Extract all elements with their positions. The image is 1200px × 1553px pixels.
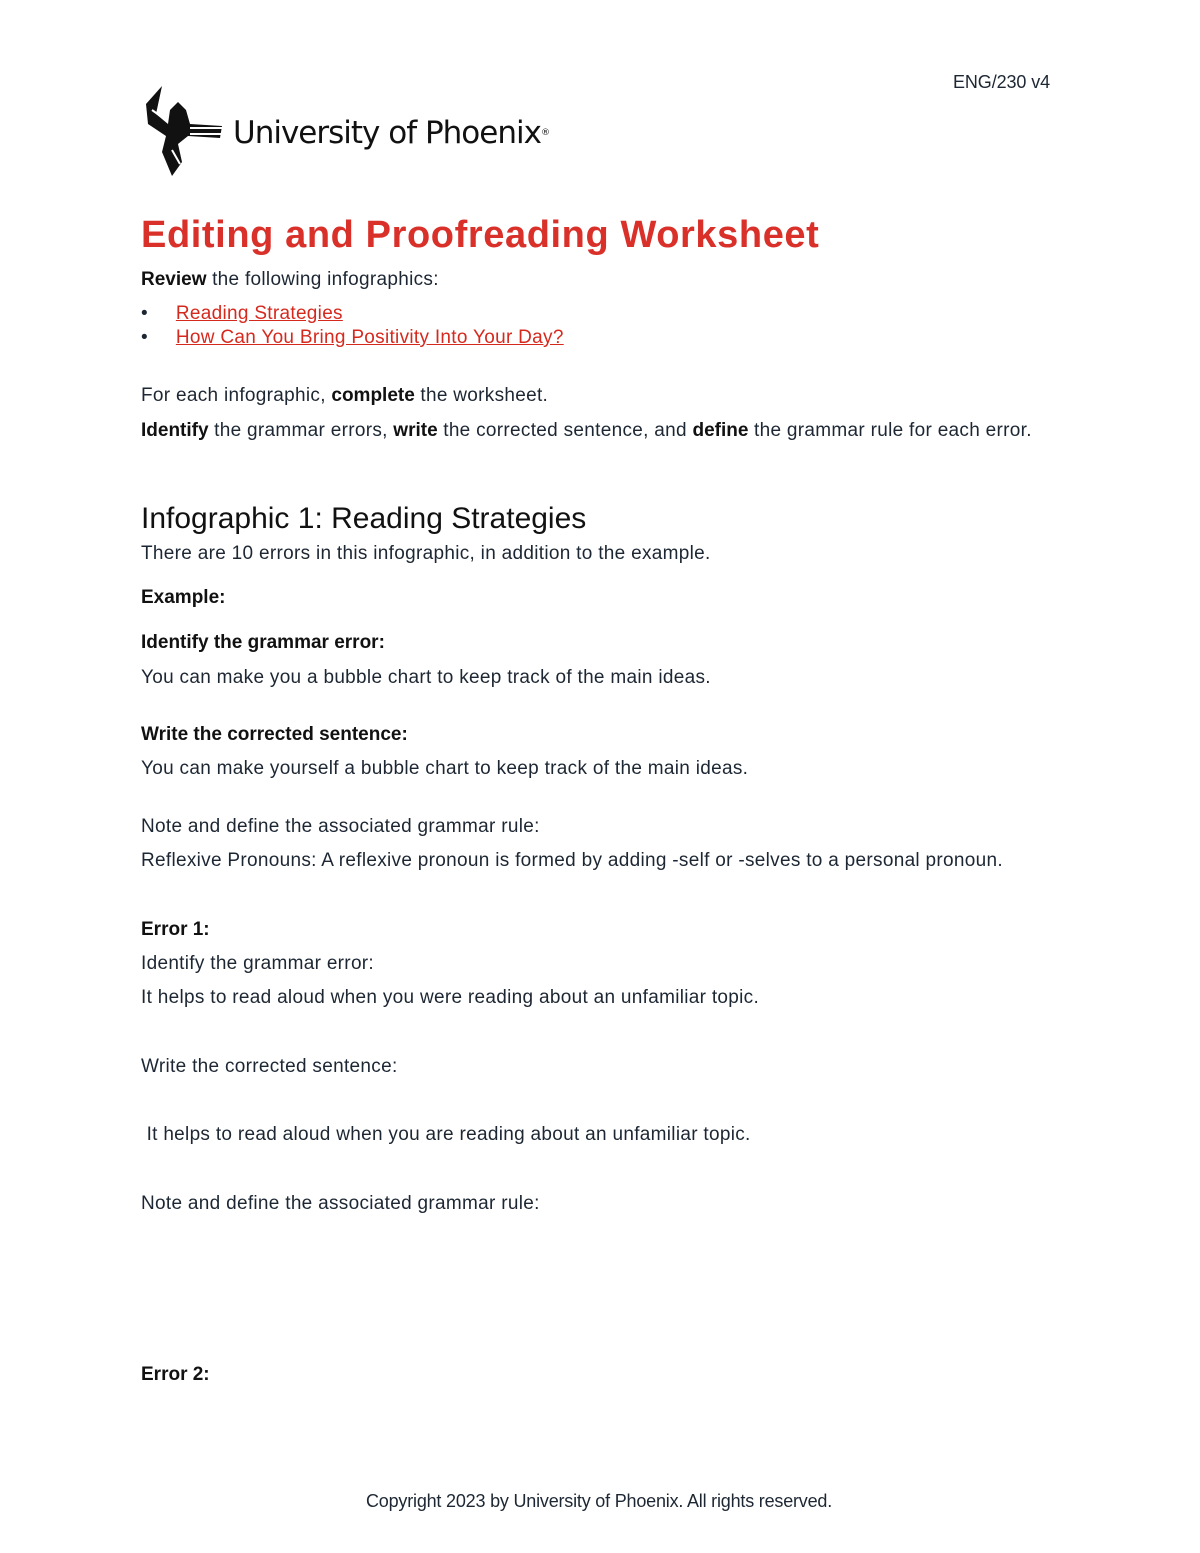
text: Write the corrected sentence: <box>141 724 408 745</box>
example block: Example: <box>141 587 225 608</box>
link list <box>141 303 564 348</box>
text: Reflexive Pronouns: A reflexive pronoun is formed by adding -self or -selves to a personal pronoun. <box>141 850 1003 871</box>
section heading: Infographic 1: Reading Strategies <box>141 502 586 535</box>
link list: • How Can You Bring Positivity Into Your Day? <box>141 327 564 348</box>
instructions: For each infographic, complete the worksheet. <box>141 385 548 406</box>
text: You can make you a bubble chart to keep track of the main ideas. <box>141 667 711 688</box>
text: It helps to read aloud when you were reading about an unfamiliar topic. <box>141 987 759 1008</box>
text: You can make yourself a bubble chart to keep track of the main ideas. <box>141 758 748 779</box>
error 1: Error 1: <box>141 919 210 940</box>
logo text: University of Phoenix® <box>233 115 549 151</box>
text: Note and define the associated grammar rule: <box>141 816 540 837</box>
logo <box>146 86 549 176</box>
error 2: Error 2: <box>141 1364 210 1385</box>
title: Editing and Proofreading Worksheet <box>141 214 819 256</box>
text: Identify the grammar error: <box>141 632 385 653</box>
intro: Review the following infographics: <box>141 269 439 290</box>
icon: phoenix <box>146 86 222 176</box>
text: Write the corrected sentence: <box>141 1056 398 1077</box>
text: There are 10 errors in this infographic, in addition to the example. <box>141 543 711 564</box>
text: Note and define the associated grammar rule: <box>141 1193 540 1214</box>
text: Identify the grammar error: <box>141 953 374 974</box>
link list: • Reading Strategies <box>141 303 343 324</box>
footer: Copyright 2023 by University of Phoenix. All rights reserved. <box>366 1491 832 1511</box>
header code: ENG/230 v4 <box>953 72 1050 92</box>
text: It helps to read aloud when you are reading about an unfamiliar topic. <box>147 1124 751 1145</box>
text: Identify the grammar errors, write the corrected sentence, and define the grammar rule for each error. <box>141 420 1032 441</box>
